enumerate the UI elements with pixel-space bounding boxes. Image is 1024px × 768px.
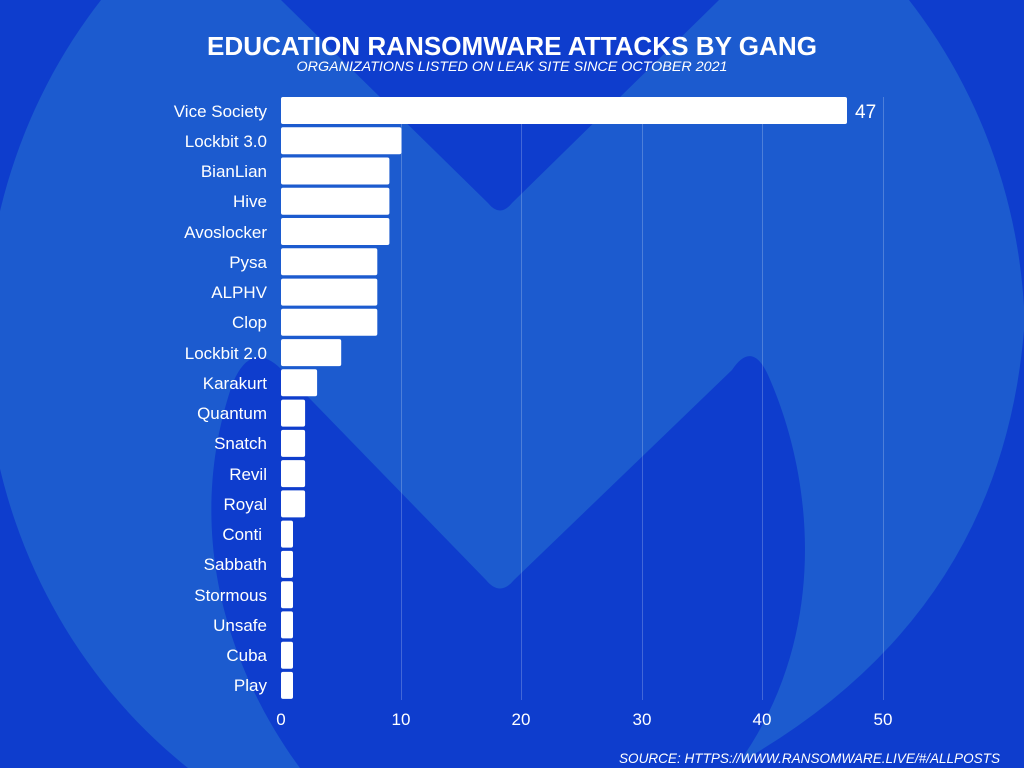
value label: 47 — [855, 102, 876, 123]
x axis labels — [276, 710, 892, 729]
category labels: Stormous — [194, 586, 267, 605]
x axis labels: 40 — [753, 710, 771, 729]
category labels — [174, 102, 268, 695]
x axis labels: 10 — [392, 710, 410, 729]
category labels: Revil — [229, 465, 267, 484]
source: SOURCE: HTTPS://WWW.RANSOMWARE.LIVE/#/ALLPOSTS — [619, 750, 1001, 766]
category labels: Conti — [222, 525, 262, 544]
category labels: Cuba — [226, 646, 268, 665]
category labels: Lockbit 2.0 — [185, 344, 267, 363]
category labels: Lockbit 3.0 — [185, 132, 267, 151]
category labels: Clop — [232, 313, 267, 332]
category labels: Hive — [233, 192, 267, 211]
category labels: Vice Society — [174, 102, 268, 121]
category labels: ALPHV — [211, 283, 268, 302]
category labels: Royal — [224, 495, 267, 514]
category labels: Karakurt — [203, 374, 267, 393]
category labels: Unsafe — [213, 616, 267, 635]
x axis labels: 50 — [874, 710, 892, 729]
category labels: BianLian — [201, 162, 267, 181]
bar chart — [174, 97, 876, 699]
title: EDUCATION RANSOMWARE ATTACKS BY GANG — [207, 31, 817, 61]
category labels: Pysa — [229, 253, 268, 272]
category labels: Quantum — [197, 404, 267, 423]
x axis labels: 20 — [512, 710, 530, 729]
category labels: Play — [234, 676, 267, 695]
category labels: Avoslocker — [184, 223, 267, 242]
x axis labels: 0 — [276, 710, 286, 729]
gridlines — [402, 97, 884, 700]
subtitle: ORGANIZATIONS LISTED ON LEAK SITE SINCE OCTOBER 2021 — [296, 58, 728, 74]
x axis labels: 30 — [633, 710, 651, 729]
category labels: Sabbath — [204, 555, 267, 574]
category labels: Snatch — [214, 434, 267, 453]
